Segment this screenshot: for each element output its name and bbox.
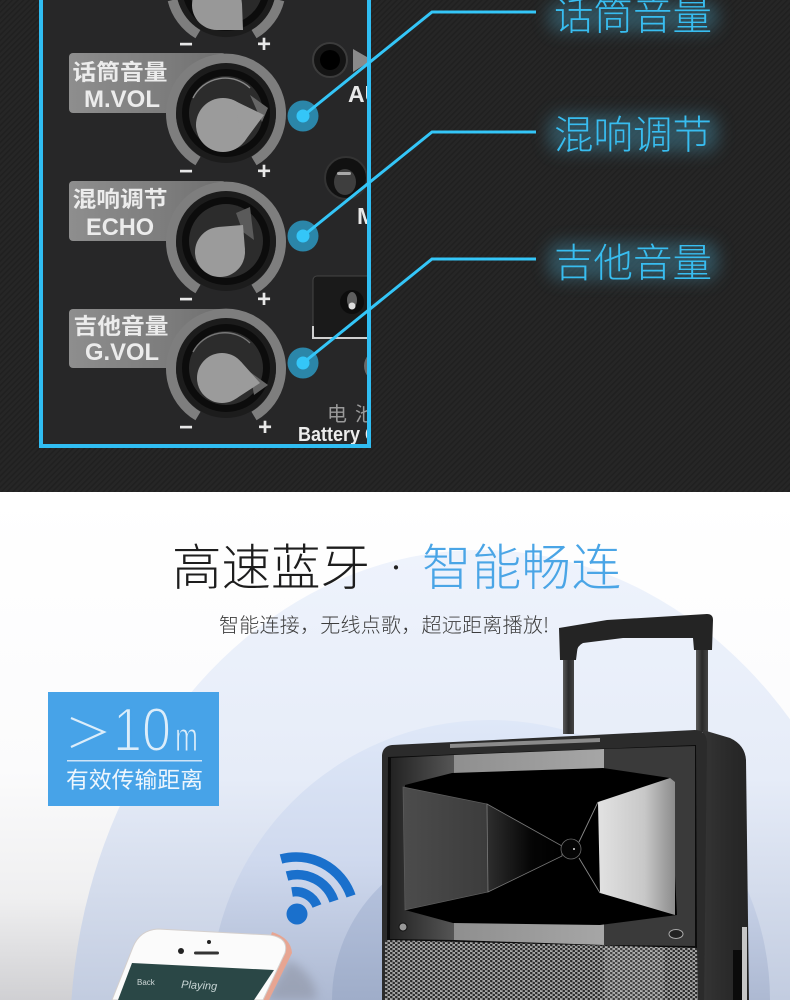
icon: wifi signal: [281, 857, 351, 924]
phone front: [112, 929, 286, 1000]
cabinet side: [690, 730, 749, 1000]
top edge highlight: [450, 738, 600, 748]
phone: [112, 929, 316, 1000]
callout: echo adjustment: [288, 104, 718, 252]
left throat: [487, 804, 562, 892]
callout: guitar volume: 吉他音量: [554, 232, 712, 289]
phone status text: Back: [137, 978, 156, 987]
mode button: M: [357, 203, 376, 229]
phone camera and speaker: [178, 940, 219, 954]
knob: G.VOL guitar volume: +: [258, 414, 272, 441]
right throat lines: [579, 802, 600, 893]
knob: ECHO reverb: −: [179, 286, 193, 313]
mode button: [324, 156, 367, 224]
knob: ECHO reverb: +: [257, 286, 271, 313]
title: [172, 529, 621, 600]
left horn wall: [403, 787, 488, 910]
callout: echo adjustment: 混响调节: [554, 104, 712, 161]
phone rose gold edge: [250, 932, 292, 1000]
knob: ECHO reverb: ECHO: [86, 214, 154, 241]
speaker: [382, 614, 749, 1000]
title: ·: [386, 552, 406, 581]
knob: G.VOL guitar volume: −: [179, 414, 193, 441]
side handle recess: [733, 927, 747, 1000]
knob: M.VOL microphone volume: −: [179, 158, 193, 185]
horn black mouth: [405, 768, 677, 925]
phone: Playing: [181, 979, 218, 993]
phone shadow: [265, 960, 316, 1000]
badge: effective transmission distance: 有效传输距离: [66, 762, 203, 795]
subtitle: 智能连接，无线点歌，超远距离播放!: [219, 609, 549, 638]
knob: M.VOL microphone volume: [69, 53, 281, 185]
callout: guitar volume: [288, 232, 718, 378]
battery label: [299, 404, 367, 444]
badge: effective transmission distance: m: [175, 714, 198, 760]
knob: ECHO reverb: [69, 181, 281, 313]
cabinet front: [382, 730, 707, 1000]
panel: bluetooth section background: [0, 492, 790, 1000]
badge: effective transmission distance: 10: [113, 696, 171, 765]
horn bezel: [387, 745, 697, 948]
right horn wall: [598, 778, 675, 915]
audio jack and AUX label: AUX: [348, 81, 397, 107]
knob: top partial: [173, 0, 279, 58]
knob: top partial: −: [179, 31, 193, 58]
badge: effective transmission distance: [48, 692, 219, 806]
phone screen: [118, 963, 274, 1000]
knob: ECHO reverb: 混响调节: [72, 182, 168, 214]
knob: M.VOL microphone volume: 话筒音量: [72, 55, 168, 87]
horn driver: [561, 839, 581, 859]
dark upper background: [0, 0, 790, 492]
trolley handle: [559, 614, 713, 734]
battery label: 电池: [327, 398, 375, 427]
title: 智能畅连: [422, 529, 621, 600]
knob: M.VOL microphone volume: M.VOL: [84, 86, 160, 113]
title: 高速蓝牙: [172, 529, 370, 600]
metal grille: [385, 940, 698, 1000]
knob: top partial: +: [257, 31, 271, 58]
knob: M.VOL microphone volume: +: [257, 158, 271, 185]
screw holes: [399, 923, 683, 938]
switch box: [312, 276, 367, 375]
callout: microphone volume: [288, 0, 718, 132]
battery label: Battery C: [298, 424, 378, 446]
knob: G.VOL guitar volume: [69, 309, 281, 441]
knob: G.VOL guitar volume: 吉他音量: [74, 309, 168, 341]
panel: control board photo: [41, 0, 397, 446]
knob: G.VOL guitar volume: G.VOL: [85, 339, 159, 366]
audio jack and AUX label: [312, 42, 367, 102]
